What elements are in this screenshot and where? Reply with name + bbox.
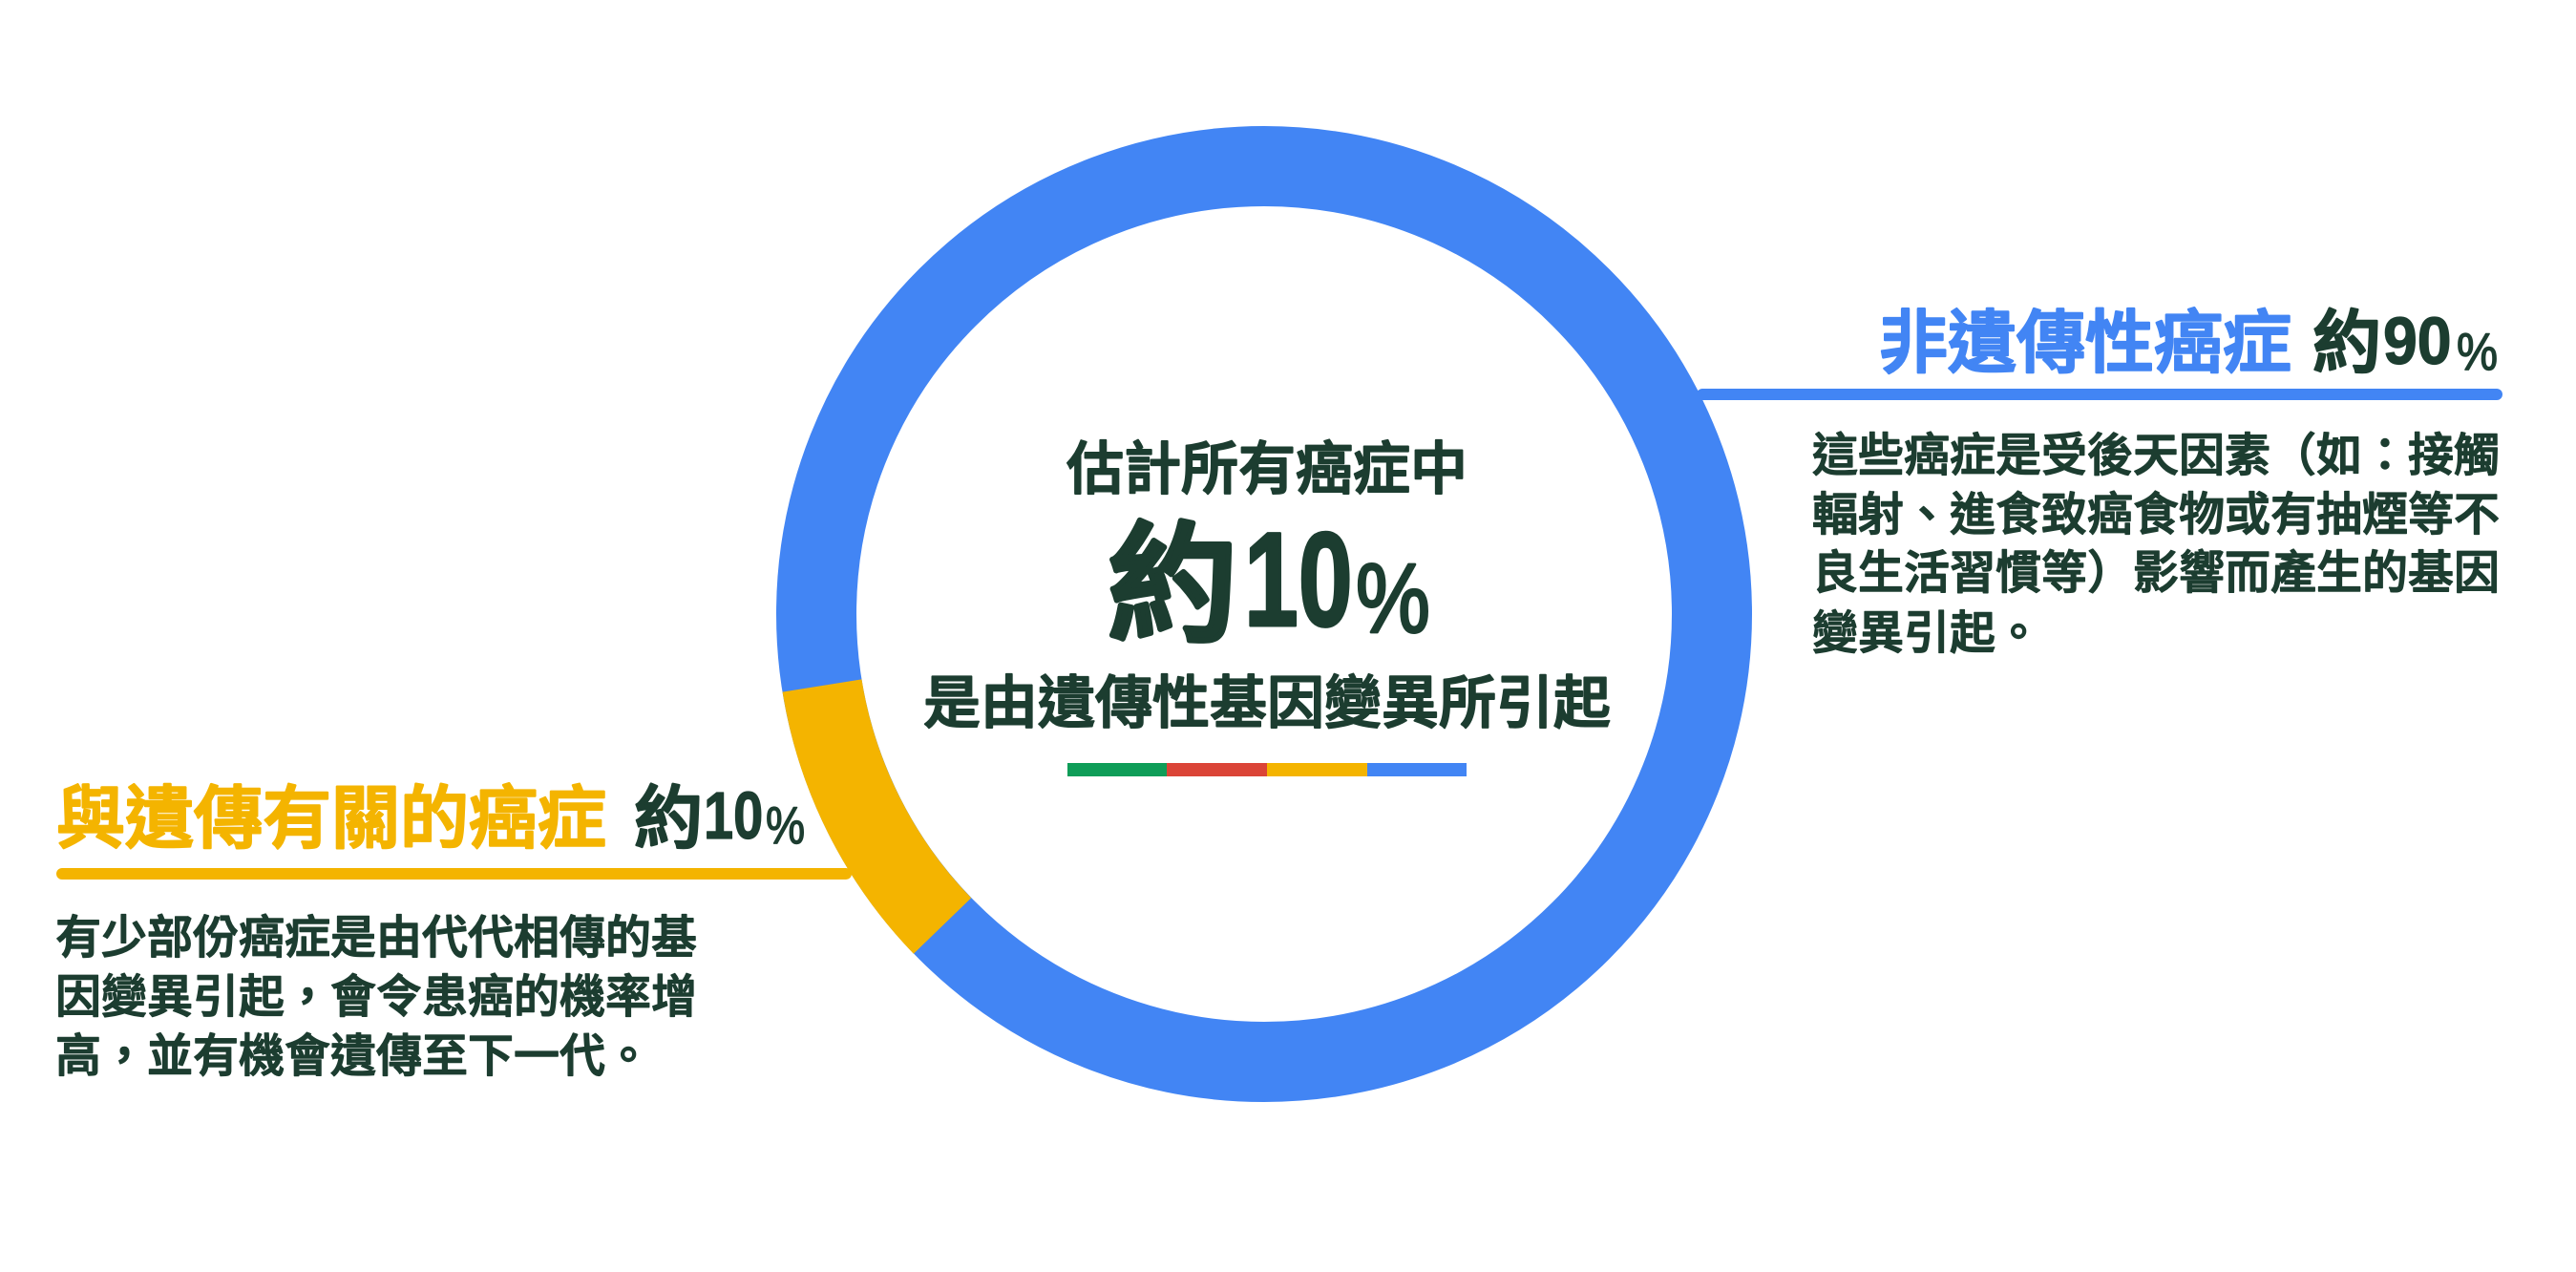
callout: hereditary cancers: 有少部份癌症是由代代相傳的基 (55, 900, 697, 966)
callout: non-hereditary cancers (1697, 286, 2502, 662)
center text: estimate: 估計所有癌症中 (1066, 423, 1467, 506)
donut chart: 90% non-hereditary, 10% hereditary (816, 166, 1712, 1062)
callout: hereditary cancers: 10 (704, 779, 763, 853)
callout: hereditary cancers: 與遺傳有關的癌症 (56, 762, 606, 862)
callout: hereditary cancers: 高，並有機會遺傳至下一代。 (55, 1018, 651, 1085)
center text: estimate (923, 423, 1611, 740)
callout: non-hereditary cancers: 非遺傳性癌症 (1879, 286, 2291, 387)
callout: hereditary cancers: 約 (634, 762, 703, 862)
callout: hereditary cancers: % (766, 795, 805, 855)
callout: non-hereditary cancers: 輻射、進食致癌食物或有抽煙等不 (1812, 477, 2500, 543)
colour bar (1067, 763, 1467, 776)
callout: hereditary cancers: 因變異引起，會令患癌的機率增 (55, 959, 697, 1026)
center text: estimate: 是由遺傳性基因變異所引起 (923, 657, 1611, 740)
callout: non-hereditary cancers: 變異引起。 (1812, 595, 2041, 662)
callout: non-hereditary cancers: % (2457, 322, 2498, 381)
center text: estimate: 10 (1244, 504, 1353, 654)
callout: non-hereditary cancers: 90 (2383, 305, 2452, 379)
callout: non-hereditary cancers: 良生活習慣等）影響而產生的基因 (1812, 535, 2500, 602)
callout: non-hereditary cancers: 這些癌症是受後天因素（如：接觸 (1812, 417, 2500, 484)
callout: hereditary cancers (55, 762, 852, 1085)
center text: estimate: 約 (1108, 480, 1237, 668)
callout: non-hereditary cancers: 約 (2312, 286, 2381, 387)
center text: estimate: % (1356, 543, 1430, 654)
